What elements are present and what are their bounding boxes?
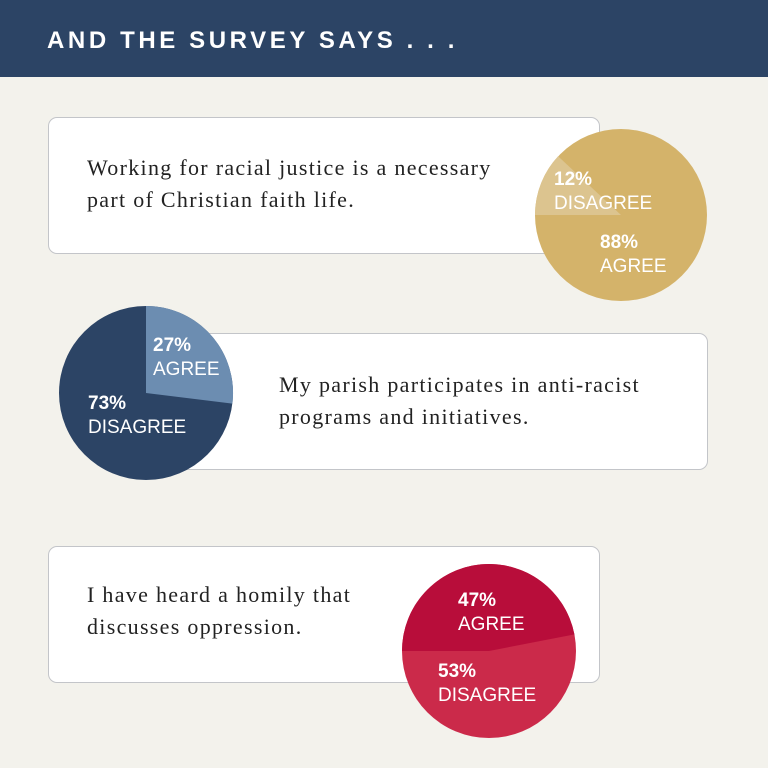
panel: question 3: [48, 546, 600, 683]
header: [0, 0, 768, 77]
pie: navy 27/73: 27%: [153, 335, 191, 356]
text: question 3: I have heard a homily that: [87, 582, 351, 607]
pie: gold 88/12: 12%: [554, 169, 592, 190]
pie: navy 27/73: AGREE: [153, 359, 220, 380]
pie: navy 27/73: DISAGREE: [88, 417, 186, 438]
pie: red 47/53: [402, 564, 576, 738]
text: question 3: discusses oppression.: [87, 614, 303, 639]
pie: gold 88/12: 88%: [600, 232, 638, 253]
text: question 3: [87, 582, 351, 639]
pie: gold 88/12: AGREE: [600, 256, 667, 277]
text: question 1: [87, 155, 492, 212]
pie: red 47/53: 47%: [458, 590, 496, 611]
pie: red 47/53: AGREE: [458, 614, 525, 635]
text: question 2: programs and initiatives.: [279, 404, 530, 429]
pie: red 47/53: DISAGREE: [438, 685, 536, 706]
pie: navy 27/73: [59, 306, 233, 480]
pie: gold 88/12: [535, 129, 707, 301]
pie: navy 27/73: 73%: [88, 393, 126, 414]
pie: red 47/53: 53%: [438, 661, 476, 682]
header: AND THE SURVEY SAYS . . .: [47, 27, 458, 54]
text: question 1: part of Christian faith life.: [87, 187, 355, 212]
text: question 2: My parish participates in anti-racist: [279, 372, 640, 397]
panel: question 2: [180, 333, 708, 470]
text: question 2: [279, 372, 640, 429]
text: question 1: Working for racial justice is a necessary: [87, 155, 492, 180]
panel: question 1: [48, 117, 600, 254]
pie: gold 88/12: DISAGREE: [554, 193, 652, 214]
